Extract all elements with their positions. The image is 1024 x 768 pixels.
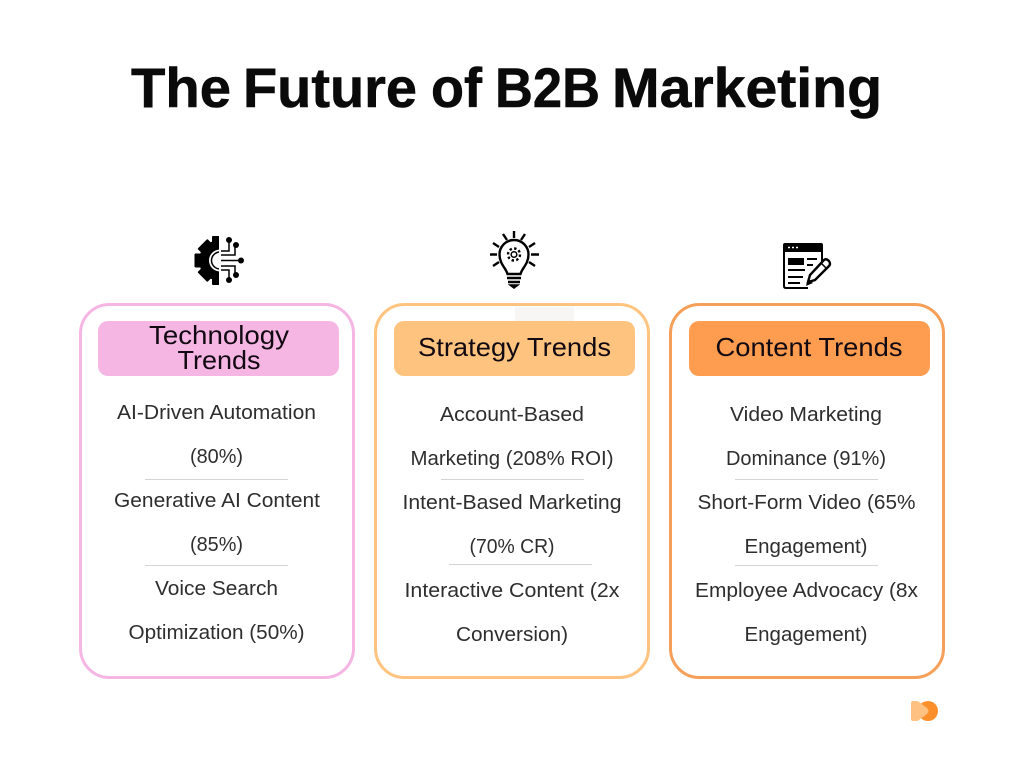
title: The [131, 56, 231, 119]
title [131, 56, 882, 119]
heading: technology trends [98, 320, 339, 376]
list: technology items: (80%) [190, 446, 243, 468]
list: content items: Engagement) [744, 536, 868, 558]
title: of [431, 56, 482, 119]
list: technology items: Optimization (50%) [128, 622, 304, 644]
icon: document with pencil [783, 243, 830, 288]
list: strategy items: Intent-Based Marketing [402, 492, 622, 514]
heading: technology trends: Trends [178, 345, 260, 375]
list: content items: Employee Advocacy (8x [695, 580, 918, 602]
title: B2B [495, 56, 600, 119]
list: strategy items: Account-Based [440, 404, 584, 426]
panel: content trends [670, 304, 944, 678]
list: strategy items: (70% CR) [470, 536, 554, 558]
list: technology items [114, 402, 320, 644]
list: content items: Dominance (91%) [726, 448, 886, 470]
list: content items: Engagement) [744, 624, 868, 646]
list: strategy items [402, 404, 622, 646]
title: Marketing [612, 56, 882, 119]
list: content items: Video Marketing [730, 404, 882, 426]
list: technology items: AI-Driven Automation [117, 402, 316, 424]
heading: strategy trends: Strategy Trends [418, 332, 611, 362]
list: strategy items: Marketing (208% ROI) [410, 448, 614, 470]
heading: technology trends: Technology [149, 320, 289, 350]
heading: strategy trends [394, 321, 635, 376]
panel outline: strategy [376, 304, 648, 678]
panel: strategy trends [376, 304, 648, 678]
list: strategy items: Interactive Content (2x [404, 580, 620, 602]
list: technology items: (85%) [190, 534, 243, 556]
panel outline: content [670, 304, 944, 678]
list: content items [695, 404, 918, 646]
heading: content trends: Content Trends [716, 332, 902, 362]
logo mark [911, 701, 938, 721]
list: technology items: Generative AI Content [114, 490, 320, 512]
list: content items: Short-Form Video (65% [698, 492, 916, 514]
icon: gear and circuit [194, 236, 244, 286]
icon: light bulb with gear [490, 231, 539, 288]
panel outline: technology [80, 304, 354, 678]
list: strategy items: Conversion) [456, 624, 568, 646]
panel: technology trends [80, 304, 354, 678]
heading: content trends [689, 321, 930, 376]
list: technology items: Voice Search [155, 578, 278, 600]
title: Future [243, 56, 417, 119]
